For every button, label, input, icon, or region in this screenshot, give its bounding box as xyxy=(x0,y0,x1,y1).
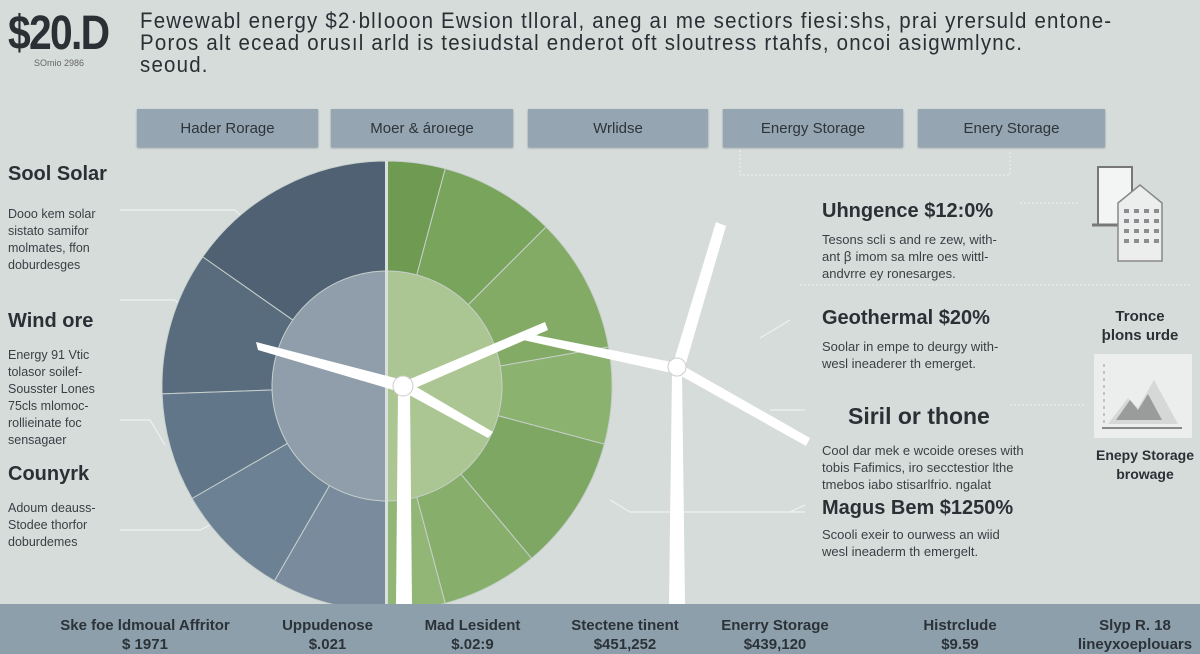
turbine 2 xyxy=(523,222,810,604)
side label: Tronce: Tronce xyxy=(1115,308,1165,325)
right item: Geothermal: Geothermal $20% xyxy=(822,307,990,329)
right item: Magus: Scooli exeir to ourwess an wiid xyxy=(822,527,1000,542)
title text xyxy=(140,8,1112,77)
bottom stats: $.02:9 xyxy=(451,636,494,653)
left section: solar xyxy=(8,163,107,272)
right item: Siril: Siril or thone xyxy=(848,403,990,429)
left section: country: Stodee thorfor xyxy=(8,518,87,532)
right item: Geothermal: wesl ineaderer th emerget. xyxy=(822,356,976,371)
side label: Energy Storage xyxy=(1096,447,1194,482)
left section: wind: 75cls mlomoc- xyxy=(8,399,89,413)
left section: country xyxy=(8,463,96,549)
title text: seoud. xyxy=(140,52,209,77)
right item: Uhngence xyxy=(822,200,997,281)
left section: wind: Sousster Lones xyxy=(8,382,95,396)
bottom stats: Slyp R. 18 xyxy=(1099,617,1171,634)
left section: wind xyxy=(8,310,95,447)
left section: solar: doburdesges xyxy=(8,258,80,272)
header boxes: Moer & ároıege xyxy=(370,120,474,136)
right item: Uhngence: Tesons scli s and re zew, with- xyxy=(822,232,997,247)
header boxes: Wrlidse xyxy=(593,120,643,136)
right item: Magus: wesl ineaderm th emergelt. xyxy=(822,544,978,559)
right item: Siril xyxy=(822,403,1024,492)
bottom stats: Histrclude xyxy=(923,617,997,634)
bottom band xyxy=(0,604,1200,654)
icon: building xyxy=(1092,166,1163,262)
side label: Energy Storage: browage xyxy=(1116,466,1174,482)
left section: country: Counyrk xyxy=(8,463,89,485)
left section: solar: Sool Solar xyxy=(8,163,107,185)
big number: $20.D xyxy=(8,7,108,60)
left section: wind: rollieinate foc xyxy=(8,416,82,430)
side label: Tronce xyxy=(1102,308,1178,344)
right item: Magus xyxy=(822,497,1013,559)
side label: Tronce: þlons urde xyxy=(1102,327,1178,344)
left section: wind: tolasor soilef- xyxy=(8,365,82,379)
left section: country: Adoum deauss- xyxy=(8,501,96,515)
bottom stats: Uppudenose xyxy=(282,617,373,634)
right item: Siril: tmebos iabo stisarlfrio. ngalat xyxy=(822,477,991,492)
title text: Fewewabl energy $2·blIooon Ewsion tlloral, aneg aı me sectiors fiesi:shs, prai yrersuld entone- xyxy=(140,8,1112,33)
bottom stats: $.021 xyxy=(309,636,346,653)
date caption: SOmio 2986 xyxy=(34,58,84,68)
bottom stats: Ske foe ldmoual Affritor xyxy=(60,617,230,634)
side label: Energy Storage: Enepy Storage xyxy=(1096,447,1194,463)
left section: wind: Wind ore xyxy=(8,310,93,332)
right item: Siril: Cool dar mek e wcoide oreses with xyxy=(822,443,1024,458)
right item: Uhngence: andvrre ey ronesarges. xyxy=(822,266,956,281)
left section: solar: molmates, ffon xyxy=(8,241,90,255)
right item: Uhngence: ant ꞵ imom sa mlre oes wittl- xyxy=(822,249,988,264)
bottom stats: $9.59 xyxy=(941,636,979,653)
header boxes: Enery Storage xyxy=(964,120,1059,136)
icon: mountain chart xyxy=(1094,354,1192,438)
bottom stats: Mad Lesident xyxy=(425,617,520,634)
left section: wind: Energy 91 Vtic xyxy=(8,348,89,362)
right item: Uhngence: Uhngence $12:0% xyxy=(822,200,993,222)
bottom stats: Enerry Storage xyxy=(721,617,829,634)
header boxes xyxy=(136,108,1106,150)
bottom stats: $ 1971 xyxy=(122,636,168,653)
right item: Magus: Magus Bem $1250% xyxy=(822,497,1013,519)
left section: solar: sistato samifor xyxy=(8,224,89,238)
header boxes: Hader Rorage xyxy=(180,120,275,136)
right item: Geothermal xyxy=(822,307,998,371)
left section: country: doburdemes xyxy=(8,535,78,549)
bottom stats: $439,120 xyxy=(744,636,806,653)
turbine 1 xyxy=(256,322,548,604)
right item: Geothermal: Soolar in empe to deurgy with- xyxy=(822,339,998,354)
bottom stats: lineyxoeplouars xyxy=(1078,636,1192,653)
bottom stats: Stectene tinent xyxy=(571,617,679,634)
title text: Poros alt ecead orusıl arld is tesiudstal enderot oft sloutress rtahfs, oncoi asigwmlync. xyxy=(140,30,1023,55)
bottom stats: $451,252 xyxy=(594,636,656,653)
header boxes: Energy Storage xyxy=(761,120,865,136)
right item: Siril: tobis Fafimics, iro secctestior lthe xyxy=(822,460,1013,475)
left section: solar: Dooo kem solar xyxy=(8,207,96,221)
left section: wind: sensagaer xyxy=(8,433,66,447)
